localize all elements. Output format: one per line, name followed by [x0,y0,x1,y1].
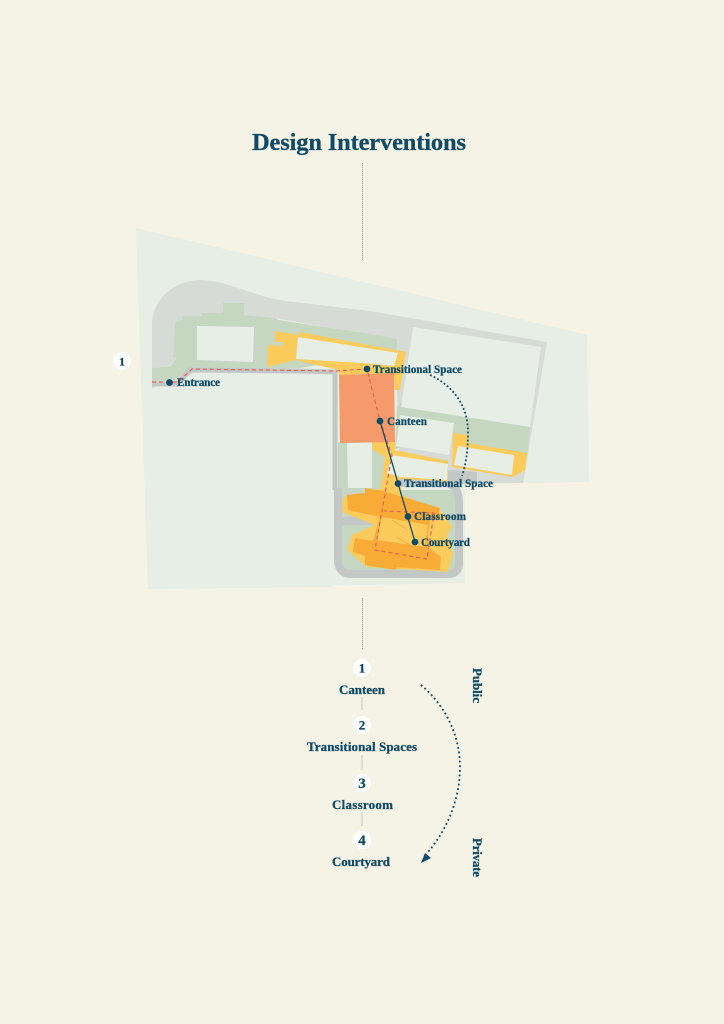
building: north range [296,337,398,366]
building: big hall [401,327,541,427]
access road [152,370,335,490]
label: Private: Private [470,838,485,877]
step 1 [339,659,386,697]
site plan map [136,228,589,589]
step 4 [332,831,391,869]
point: Entrance: Entrance [177,377,220,389]
classroom light surround [342,488,453,572]
point: Canteen: Canteen [387,416,428,428]
step 4: Courtyard [332,854,391,869]
building: east wing upper [396,415,454,455]
building: far east [454,446,514,475]
grey forecourt [397,470,477,484]
green lawns west [152,303,397,381]
site boundary [136,228,589,589]
step 3 [332,774,393,812]
step 3: Classroom [332,797,393,812]
step 2: Transitional Spaces [307,739,417,754]
point: Courtyard: Courtyard [421,537,471,549]
point: Transitional Space north: Transitional Space [373,364,462,376]
dotted arc [430,375,468,476]
west block [148,373,332,589]
label: Public: Public [470,668,485,703]
step 4: 4 [358,833,366,849]
yellow transitional zone south [372,442,448,495]
point: Classroom: Classroom [414,511,467,523]
building: small [347,443,372,488]
courtyard [377,517,428,547]
step 1: 1 [359,660,365,676]
grey paved grounds [152,280,547,484]
map number badge [113,352,131,370]
green lawns east [395,402,530,456]
public to private dotted arrow [421,685,460,863]
yellow transitional zone east [452,433,527,477]
loop interior green [340,490,460,572]
blue route line [380,421,415,542]
red dashed route [152,369,434,559]
canteen block [339,373,395,443]
map number badge: 1 [119,354,125,368]
point: Transitional Space south: Transitional Space [404,478,493,490]
building: northwest [197,326,254,362]
step 2: 2 [359,718,365,732]
road spur [339,517,374,525]
classroom block [347,488,441,570]
loop road [338,488,459,574]
title: Design Interventions [252,129,466,156]
step 1: Canteen [339,682,386,697]
yellow transitional zone north [267,331,406,390]
step 3: 3 [358,776,366,792]
building: east wing lower [387,455,448,480]
step 2 [307,716,417,754]
loop road top [400,483,459,503]
ordered list of spaces [307,659,417,869]
